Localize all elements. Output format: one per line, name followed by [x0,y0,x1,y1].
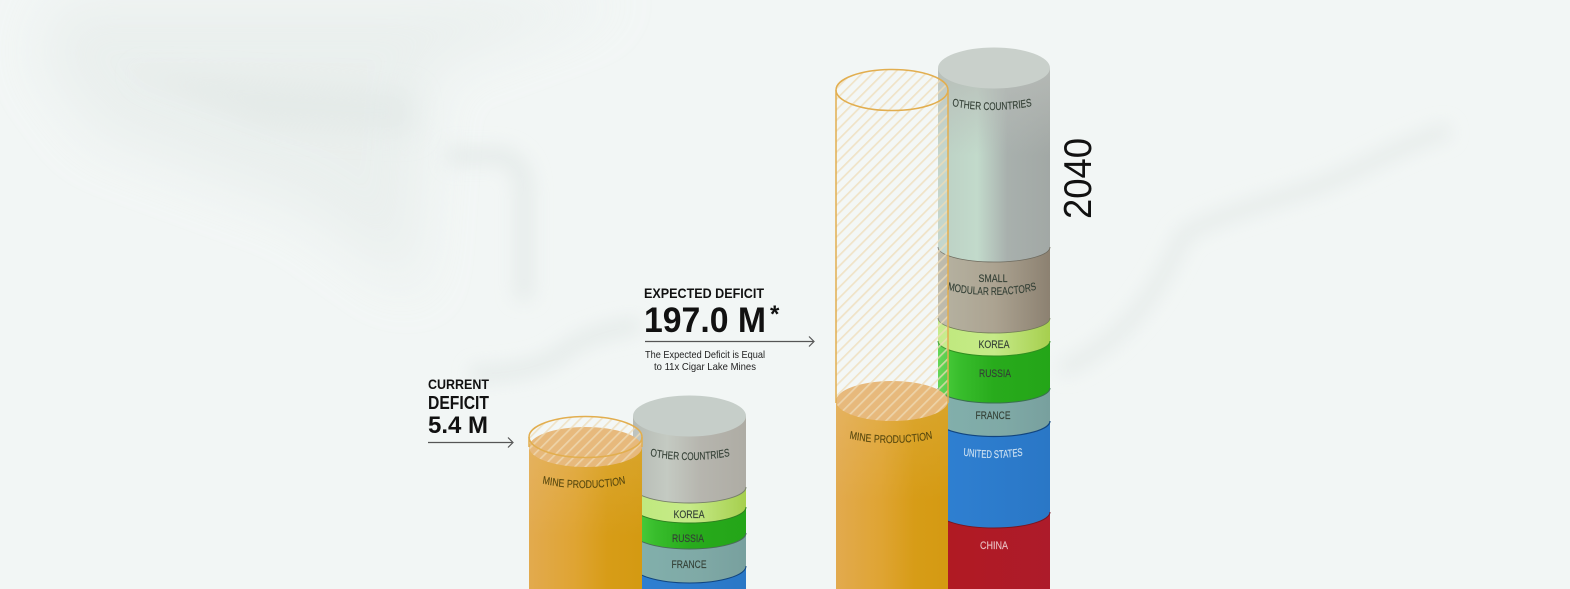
segment: Small modular reactors [938,240,1050,333]
label: Russia (current): RUSSIA [672,533,705,545]
label: mine production (2040): MINE PRODUCTION [850,431,932,444]
label: modular reactors: MODULAR REACTORS [948,282,1036,296]
callout: current deficit: DEFICIT [428,393,489,413]
label: France (current): FRANCE [672,559,706,571]
arrow: expected deficit [645,336,814,346]
callout: expected deficit: 197.0 M [644,301,766,340]
callout: current deficit: 5.4 M [428,412,488,439]
segment: Korea [938,310,1050,356]
label: China: CHINA [980,540,1009,552]
cylinder: current mine production [529,427,642,589]
callout: current deficit: CURRENT [428,376,489,392]
segment: Russia [938,335,1050,403]
callout: current deficit [428,376,489,439]
segment: Other countries (current) [633,416,746,503]
cylinder stack: 2040 demand [938,48,1051,589]
mine production top (2040) [836,381,948,421]
cylinder top (current) [633,396,746,436]
label: United States: UNITED STATES [964,448,1022,458]
chart group: cylinders [528,48,1051,589]
segment: United States [938,410,1050,528]
arrow: current deficit [428,438,513,448]
segment: France [938,380,1050,436]
segment: Korea (current) [633,480,746,523]
label: small: SMALL [978,273,1008,285]
hatched deficit cylinder (current) [529,416,642,467]
segment: China [938,500,1050,589]
cylinder top (2040) [938,48,1050,88]
label: other countries (2040): OTHER COUNTRIES [952,98,1032,110]
label: Korea (2040): KOREA [978,339,1010,351]
segment: France (current) [633,530,746,583]
segment: United States (current) [633,560,746,589]
cylinder: 2040 mine production [836,381,948,589]
cylinder stack: current demand [633,396,746,589]
callout: expected deficit: EXPECTED DEFICIT [644,285,764,301]
callout: expected deficit: to 11x Cigar Lake Mines [654,361,756,373]
label: Russia (2040): RUSSIA [979,368,1012,380]
label: other countries (current): OTHER COUNTRIES [650,448,730,460]
mine production top (current) [529,427,642,467]
callout: expected deficit: The Expected Deficit is Equal [645,349,765,361]
callout: expected deficit: * [770,301,780,328]
year label 2040: 2040 [1057,138,1100,219]
callout: expected deficit [644,285,780,373]
label: Korea (current): KOREA [674,509,705,521]
hatched deficit cylinder (2040) [836,69,948,421]
segment: Other countries [938,68,1050,262]
segment: Russia (current) [633,500,746,549]
label: mine production (current): MINE PRODUCTION [542,476,625,488]
label: France (2040): FRANCE [976,410,1010,422]
